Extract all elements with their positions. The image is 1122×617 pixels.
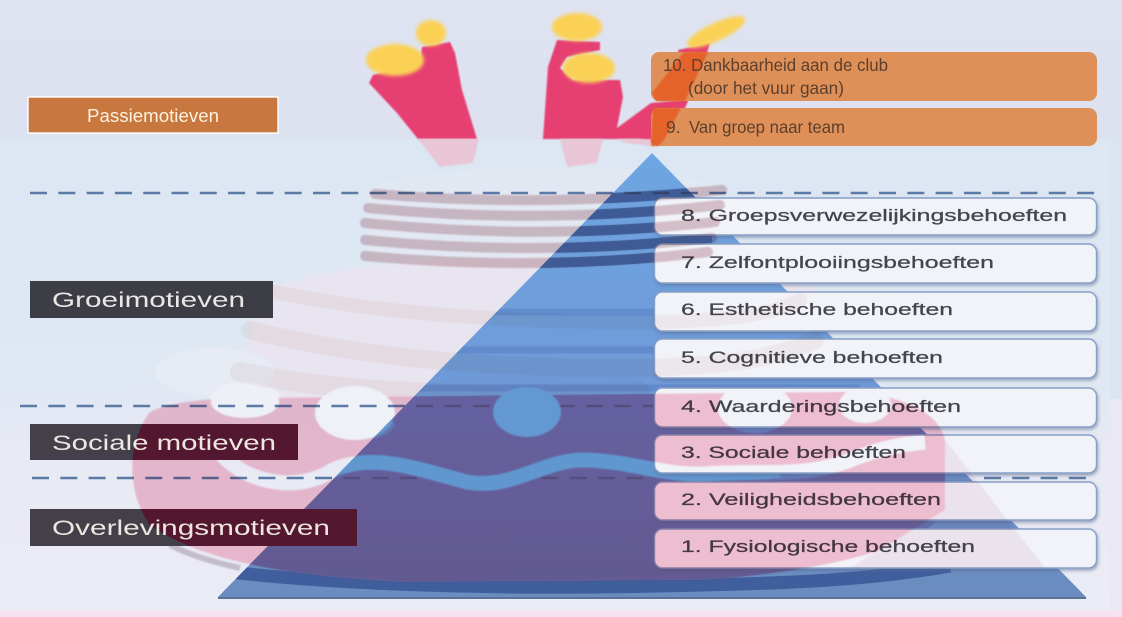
label: Sociale motieven: Sociale motieven [52, 432, 276, 455]
need bars 8 to 1 [654, 198, 1096, 568]
box 9: Van groep naar team: Van groep naar team [689, 117, 845, 137]
label: Passiemotieven: Passiemotieven [87, 105, 219, 126]
white blobs and icing wave [211, 383, 891, 440]
lower edge shadow [170, 545, 240, 568]
bar 3: 3. Sociale behoeften [681, 443, 906, 462]
bar 7: 7. Zelfontplooiingsbehoeften [681, 253, 994, 272]
illustration: pale cake tiers [155, 168, 835, 440]
label: Groeimotieven: Groeimotieven [52, 289, 245, 312]
bar 8: 8. Groepsverwezelijkingsbehoeften [681, 206, 1067, 225]
bar 4 [654, 388, 1096, 427]
re-lit wave and blobs inside pyramid [325, 387, 780, 483]
bar 2: 2. Veiligheidsbehoeften [681, 490, 941, 509]
faded right side of the cake [850, 440, 1045, 568]
label: Overlevingsmotieven: Overlevingsmotieven [52, 517, 330, 540]
bar 6 [654, 292, 1096, 331]
box 9: Van groep naar team [651, 108, 1097, 146]
middle tier stripes [240, 292, 815, 394]
label: Overlevingsmotieven [30, 509, 357, 546]
bar 1 [654, 529, 1096, 568]
bar 8 [654, 198, 1096, 235]
illustration: candles and flames [366, 10, 749, 167]
pyramid shading: stripes and lower band [235, 188, 951, 594]
bar 5 [654, 339, 1096, 378]
bar 5: 5. Cognitieve behoeften [681, 348, 943, 367]
box 10: Dankbaarheid aan de club: 10. Dankbaarheid aan de club [663, 55, 888, 75]
bar 3 [654, 435, 1096, 473]
divider lines [20, 193, 1097, 478]
box 10: Dankbaarheid aan de club: (door het vuur gaan) [688, 78, 844, 98]
label: Sociale motieven [30, 424, 298, 460]
bottom tier pink body [132, 392, 945, 582]
pyramid [218, 153, 1086, 598]
bar 2 [654, 482, 1096, 520]
label: Groeimotieven [30, 281, 273, 318]
box 9: Van groep naar team: 9. [666, 117, 681, 137]
box 10: Dankbaarheid aan de club [651, 52, 1097, 101]
bar 1: 1. Fysiologische behoeften [681, 537, 975, 556]
top tier stripes [365, 190, 722, 263]
bar 7 [654, 244, 1096, 283]
label: Passiemotieven [28, 97, 278, 133]
bar 6: 6. Esthetische behoeften [681, 300, 953, 319]
bar 4: 4. Waarderingsbehoeften [681, 397, 961, 416]
illustration: cake overlay tinting pyramid and bars [132, 190, 1045, 582]
